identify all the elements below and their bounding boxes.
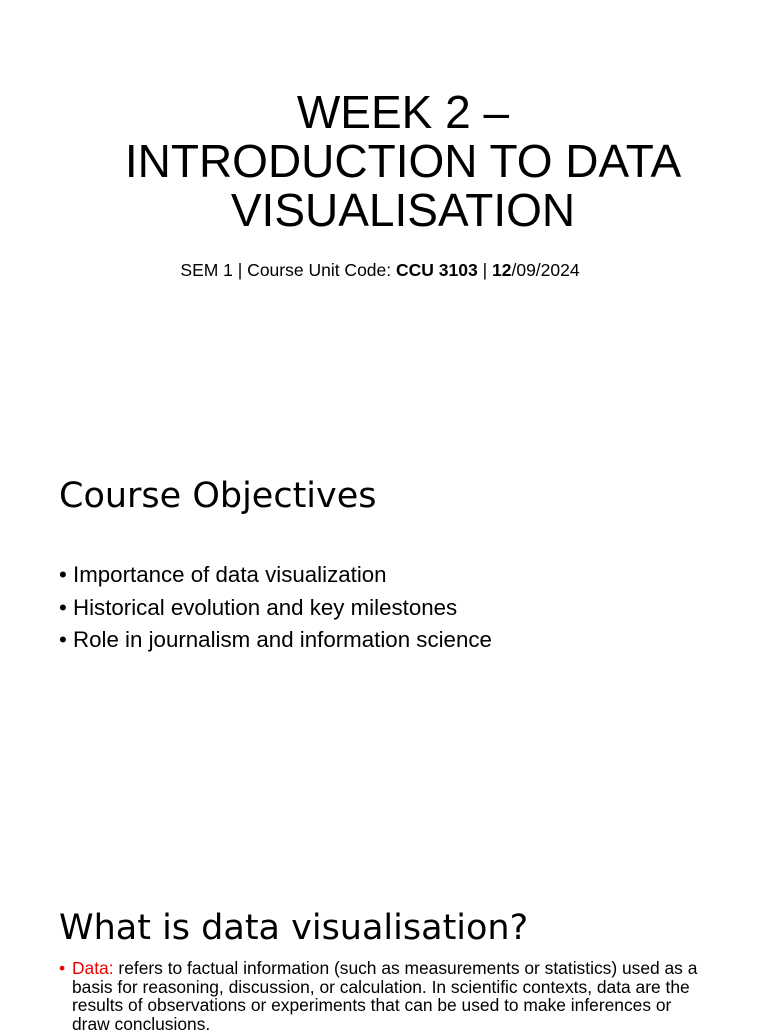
- title: WEEK 2 –: [297, 86, 509, 138]
- heading: course objectives: Course Objectives: [59, 476, 377, 516]
- definition text block: Data: refers to factual information (such as measurements or statistics) used as a basis for reasoning, discussion, or calculation. In scientific contexts, data are the results of observations or experiments that can be used to make inferences or draw conclusions.: [72, 958, 697, 1034]
- title: [125, 86, 682, 236]
- objectives list: • Role in journalism and information science: [59, 627, 492, 652]
- title: VISUALISATION: [231, 184, 575, 236]
- heading: what is data visualisation: What is data visualisation?: [59, 908, 528, 948]
- objectives list: • Historical evolution and key milestones: [59, 594, 457, 620]
- subtitle: SEM 1 | Course Unit Code: CCU 3103 | 12/09/2024: [180, 260, 580, 280]
- title: INTRODUCTION TO DATA: [125, 135, 681, 187]
- definition text block: •: [59, 958, 65, 978]
- objectives list: [59, 562, 492, 652]
- objectives list: • Importance of data visualization: [59, 562, 387, 587]
